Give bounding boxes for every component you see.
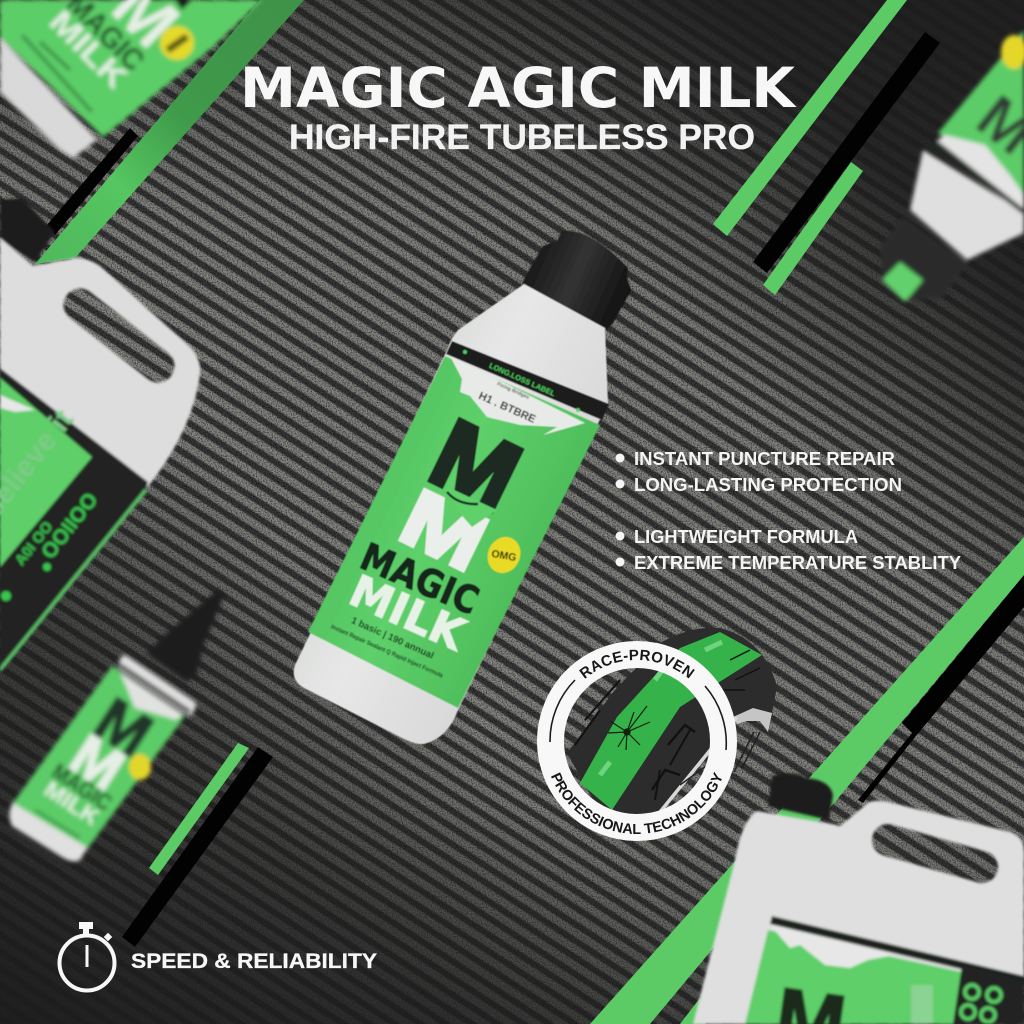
- race-proven badge: [537, 628, 777, 841]
- blurred small dropper bottle: lower-left: M: [83, 685, 164, 771]
- feature: protection: LONG-LASTING PROTECTION: [634, 475, 902, 495]
- subtitle: HIGH-FIRE TUBELESS PRO: [289, 118, 755, 157]
- speed and reliability caption: SPEED & RELIABILITY: [131, 949, 377, 973]
- blurred bottle: top-left: MILK: [42, 3, 135, 96]
- small print: 1 basic | 190 annual: [349, 615, 435, 662]
- feature: lightweight: LIGHTWEIGHT FORMULA: [634, 527, 858, 547]
- bottle label: H1 . BTBRE: [477, 390, 537, 426]
- green face accent: [450, 488, 497, 527]
- title: MAGIC AGIC MILK: [240, 56, 797, 120]
- top-right accent stripes: [713, 0, 940, 295]
- main product bottle: [294, 231, 631, 744]
- icon: stopwatch: [60, 922, 114, 990]
- jug body with handle: [693, 801, 1024, 1024]
- MAGIC wordmark: MAGIC: [354, 534, 485, 623]
- bottle label: Fixing Bridges: [496, 381, 530, 401]
- blurred small dropper bottle: lower-left: [9, 590, 225, 861]
- feature: puncture repair: INSTANT PUNCTURE REPAIR: [634, 449, 895, 469]
- feature: temperature: EXTREME TEMPERATURE STABLITY: [634, 553, 961, 573]
- blurred bottle: top-right: [880, 30, 1024, 302]
- bottle label: Instant Repair Sealant Q Rapid Inject Formula: [330, 623, 444, 680]
- big white M: M: [388, 472, 500, 588]
- ring side strokes: [550, 680, 726, 750]
- jug label: [0, 368, 148, 672]
- puncture mark: [608, 706, 650, 750]
- blurred small dropper bottle: lower-left: M: [59, 722, 135, 803]
- badge ring: [550, 654, 724, 828]
- jug label: [745, 916, 1024, 1024]
- yellow badge: [482, 532, 526, 578]
- yellow badge: OMG: [490, 548, 517, 564]
- blurred small dropper bottle: lower-left: MAGIC: [47, 758, 117, 816]
- blurred jug: bottom-right: [693, 773, 1024, 1024]
- blurred jug: left: [0, 198, 200, 672]
- tire illustration: [567, 628, 777, 816]
- bottle cap: [522, 231, 631, 330]
- feature list: [616, 449, 961, 573]
- jug cap: [768, 773, 833, 820]
- jug label: OOIIOO: [37, 489, 103, 563]
- blurred bottle: top-left: [0, 0, 262, 158]
- lower-right accent stripes: [590, 537, 1024, 1024]
- jug body with handle: [0, 236, 202, 490]
- badge top text: RACE-PROVEN: [579, 650, 695, 679]
- blurred small dropper bottle: lower-left: MILK: [40, 776, 105, 830]
- jug label: A0I OO: [12, 518, 57, 569]
- bottle body: [294, 284, 608, 744]
- bottle label: LONG.LOSS LABEL: [488, 361, 557, 398]
- badge bottom text: PROFESSIONAL TECHNOLOGY: [551, 772, 722, 834]
- big dark M: M: [415, 398, 537, 532]
- MILK wordmark: MILK: [342, 566, 474, 662]
- top-left accent stripes: [35, 0, 304, 264]
- lower-left accent stripes: [122, 743, 273, 947]
- jug cap: [0, 198, 55, 262]
- bottle label: [308, 341, 609, 708]
